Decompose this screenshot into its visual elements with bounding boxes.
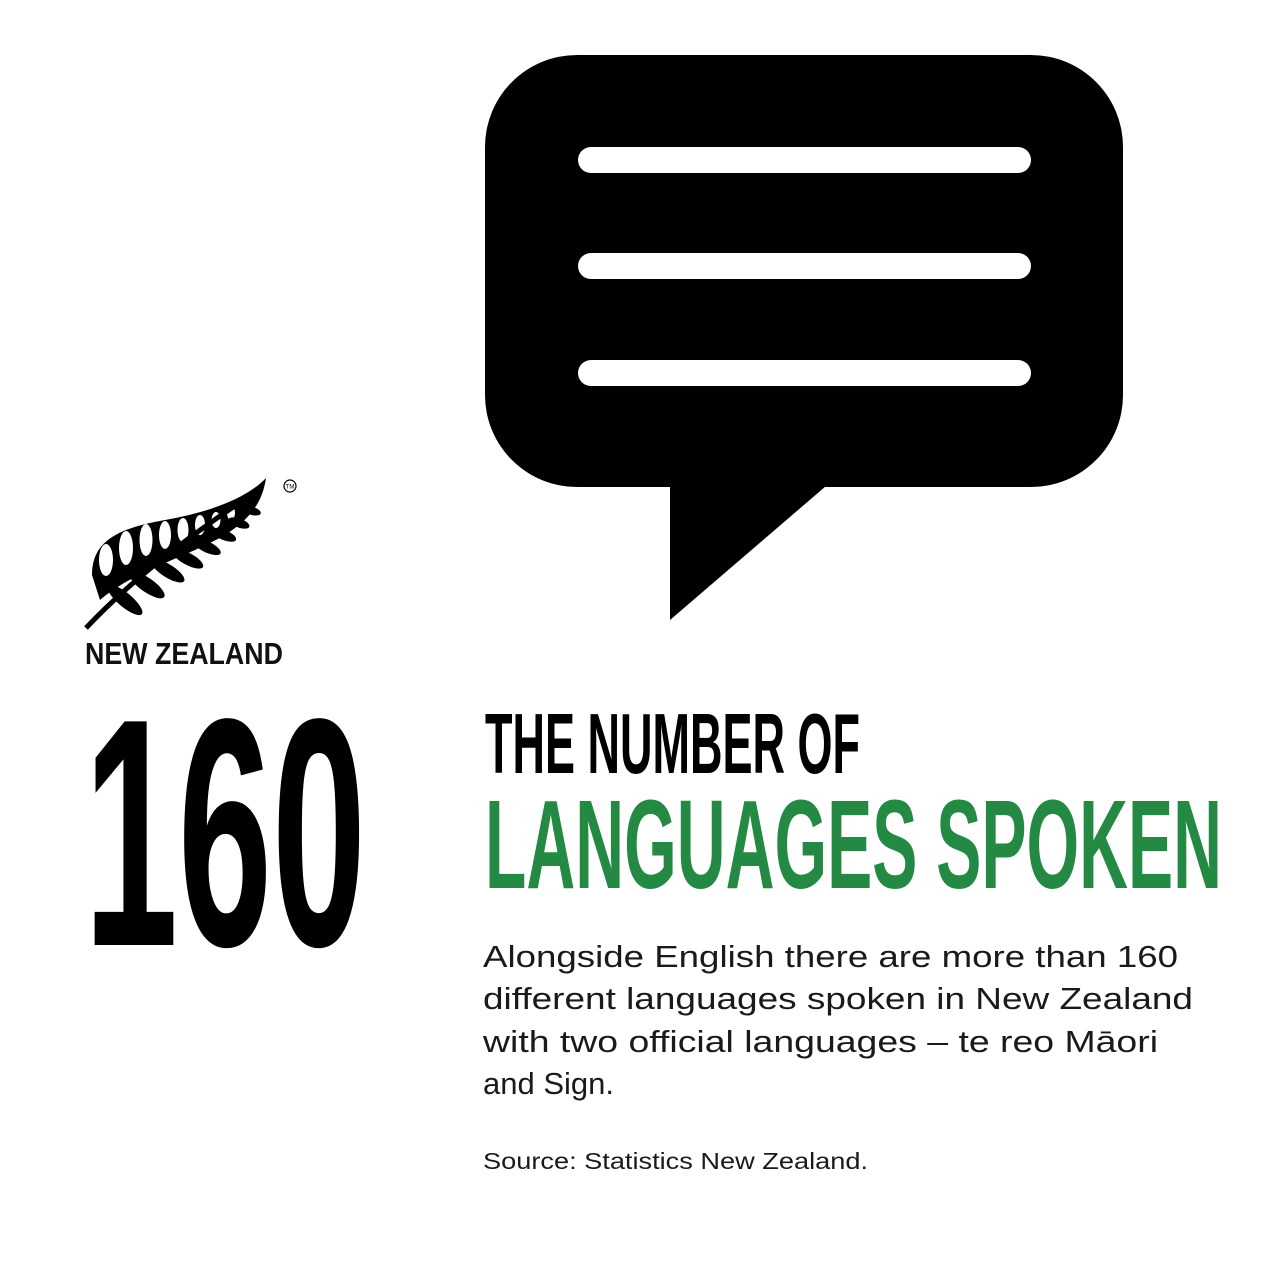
logo text: NEW ZEALAND: NEW ZEALAND <box>85 636 283 671</box>
body text: and Sign. <box>483 1066 614 1101</box>
source: Source: Statistics New Zealand. <box>483 1148 868 1174</box>
body text: different languages spoken in New Zealand <box>483 981 1193 1016</box>
big number: 160: 160 <box>84 651 366 1014</box>
body text <box>482 939 1193 1101</box>
heading line 1: THE NUMBER OF <box>485 697 860 792</box>
logo: New Zealand fern <box>86 478 296 628</box>
body text: with two official languages – te reo Māori <box>482 1024 1158 1059</box>
body text: Alongside English there are more than 160 <box>483 939 1178 974</box>
icon: speech bubble <box>485 55 1123 620</box>
logo: New Zealand fern: TM <box>286 484 294 490</box>
